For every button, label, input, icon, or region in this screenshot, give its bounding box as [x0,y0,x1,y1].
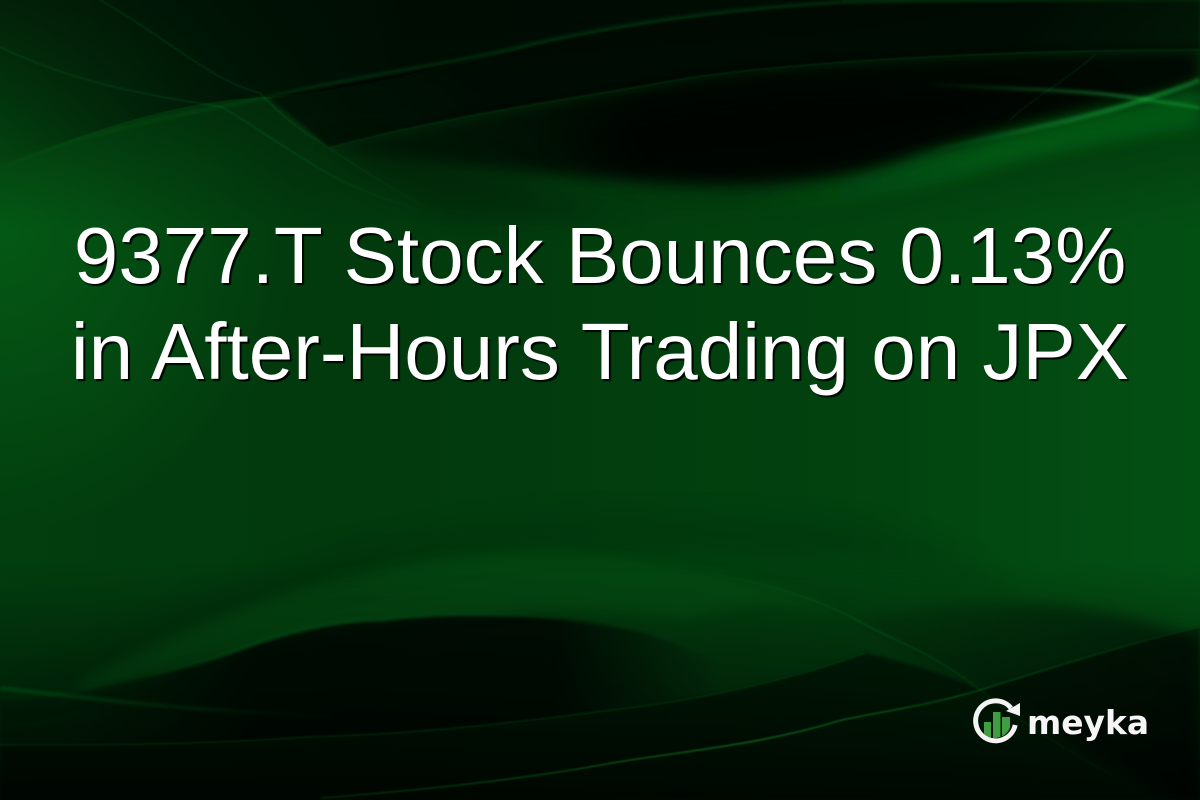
title: 9377.T Stock Bounces 0.13% [74,211,1126,300]
logo: meyka [973,698,1149,744]
title: in After-Hours Trading on JPX [71,307,1129,396]
icon: circular arrow with bar chart [976,701,1020,742]
title [71,211,1130,398]
wordmark: meyka [1027,703,1149,742]
